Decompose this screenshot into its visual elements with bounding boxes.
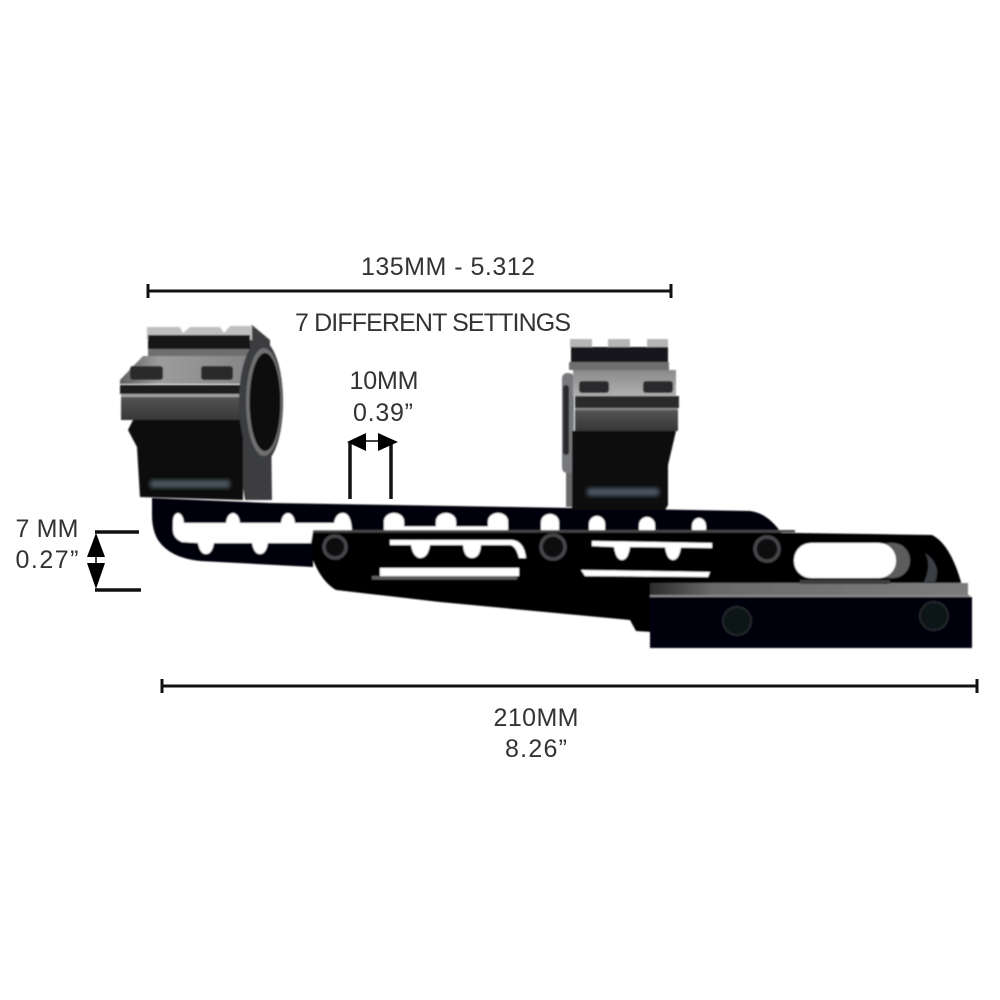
label: 210mm overall length: 210MM (494, 704, 578, 732)
label: 0.27 inch height: 0.27” (16, 546, 78, 574)
scope mount product illustration (120, 325, 972, 648)
label: 135mm spacing: 135MM - 5.312 (361, 253, 535, 281)
label: 10mm notch pitch: 10MM (350, 367, 418, 395)
lower sliding plate (313, 530, 961, 632)
dimension: rail height bracket and arrows (87, 532, 141, 590)
dimension: notch pitch bracket and arrows (347, 433, 398, 499)
upper rail bar with adjustment notches (152, 498, 782, 567)
right scope ring (562, 339, 679, 510)
label: 0.39 inch notch pitch: 0.39” (353, 399, 413, 427)
right slot openings (581, 541, 712, 577)
label: 7 mm height: 7 MM (16, 515, 78, 543)
dimension: overall length line (162, 679, 977, 693)
left scope ring (120, 325, 283, 500)
left slot openings (372, 540, 526, 580)
through slot at rear of plate (794, 543, 937, 582)
dimension: ring spacing line (148, 284, 671, 298)
mounting base block (650, 580, 972, 648)
label: 8.26 inch overall length: 8.26” (505, 735, 567, 763)
base block screws (723, 602, 948, 635)
label: 7 different settings: 7 DIFFERENT SETTINGS (295, 309, 571, 337)
plate screws (324, 535, 779, 561)
